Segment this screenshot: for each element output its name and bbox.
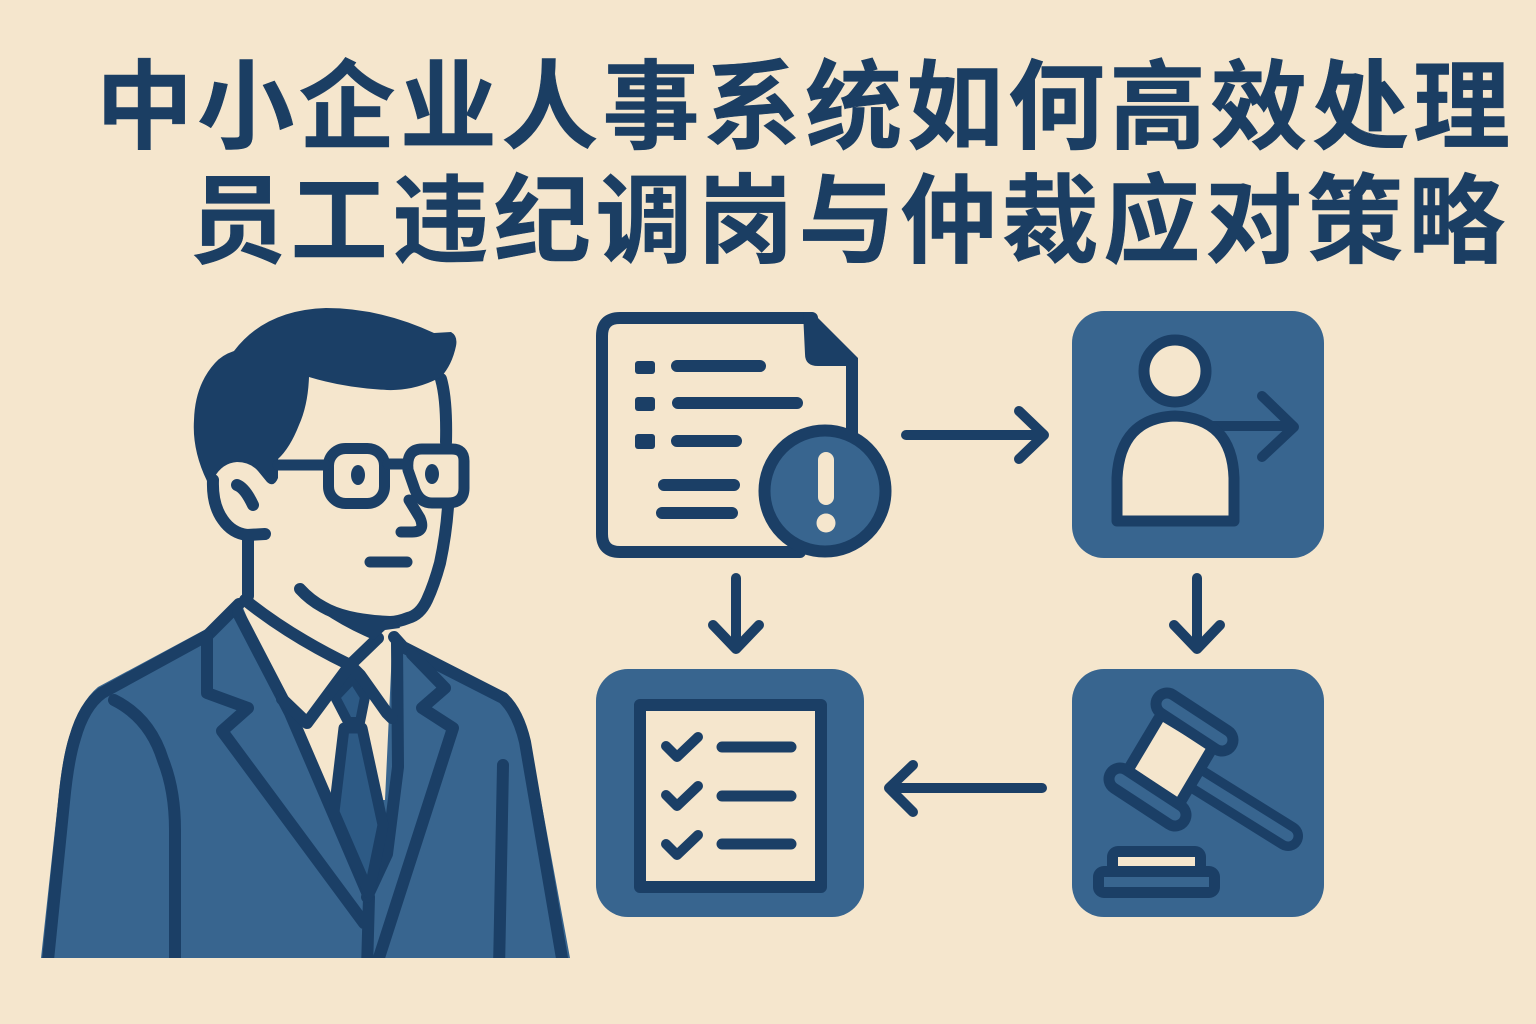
person head (1144, 340, 1206, 402)
panel: checklist icon (596, 669, 864, 917)
panel: gavel icon (1072, 669, 1324, 917)
right lapel and front edge (367, 643, 453, 970)
jacket outline (47, 604, 564, 970)
chin shadow (328, 616, 400, 638)
folded corner (803, 312, 858, 366)
icon: document with warning (602, 312, 886, 552)
title (96, 53, 1510, 276)
hair (194, 308, 456, 484)
shirt collar (245, 600, 392, 723)
person body (1117, 416, 1234, 521)
gavel bottom cap (1120, 779, 1175, 815)
jacket (41, 598, 570, 958)
tie (334, 678, 383, 893)
face outline and jaw (300, 379, 448, 622)
left lapel (207, 613, 369, 970)
ear (213, 480, 265, 535)
mouth (370, 556, 407, 568)
gavel handle (1195, 778, 1288, 836)
panel: employee transfer icon (1072, 311, 1324, 558)
checklist sheet (640, 705, 821, 887)
title line 2: 员工违纪调岗与仲裁应对策略 (189, 167, 1505, 276)
shoulder and sleeve seams (114, 700, 503, 970)
arrow: document to transfer (906, 411, 1044, 459)
title line 1: 中小企业人事系统如何高效处理 (96, 53, 1510, 162)
illustration: businessman in suit with glasses (41, 308, 570, 970)
arrow leaving person (1200, 396, 1294, 457)
neck (242, 537, 254, 596)
document outline (602, 318, 812, 552)
gavel head block (1135, 722, 1206, 797)
arrow: transfer down to gavel (1174, 578, 1220, 649)
gavel top cap (1167, 704, 1222, 740)
document text lines (635, 361, 797, 513)
glasses (278, 448, 464, 504)
arrow: document down to checklist (713, 578, 759, 649)
warning badge (764, 430, 886, 552)
sound block (1104, 857, 1209, 887)
arrow: gavel to checklist (889, 765, 1042, 812)
check lines (722, 747, 791, 844)
nose (401, 500, 422, 532)
check marks (666, 737, 698, 855)
